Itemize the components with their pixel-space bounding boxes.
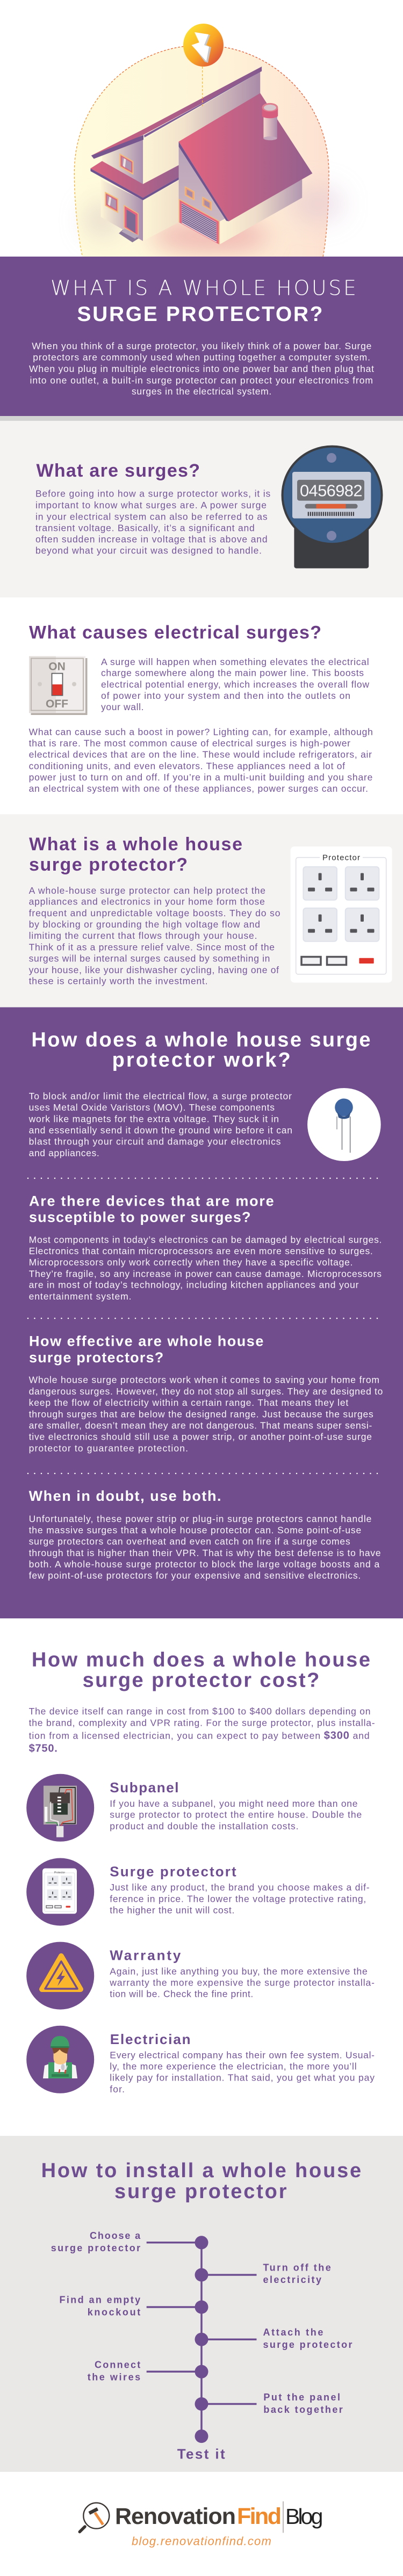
step: put the panel back together — [263, 2392, 343, 2415]
website url: blog.renovationfind.com — [132, 2534, 271, 2548]
heading: How does a whole house surge — [31, 1028, 370, 1051]
dotted divider — [28, 1318, 378, 1319]
icon: warning triangle — [26, 1942, 94, 2010]
wordmark: Renovation — [115, 2504, 236, 2529]
intro text — [29, 340, 374, 397]
icon: magnifier with hammer — [80, 2503, 109, 2532]
cost item: electrician — [26, 2026, 375, 2095]
body text: appliances and electronics in your home form those — [29, 896, 265, 907]
subheading: devices — [29, 1193, 274, 1225]
electrician heading: Electrician — [110, 2031, 190, 2047]
heading: surge protector — [114, 2180, 287, 2203]
body text: second paragraph: electrical devices that are on the line. These would include refrigerators, air — [29, 749, 372, 760]
body text: devices: are in most of today’s technology, including kitchen appliances and your — [29, 1280, 359, 1290]
title: SURGE PROTECTOR? — [77, 303, 322, 326]
body text: effectiveness: through surges that are below the designed range. Just because the surges — [29, 1409, 373, 1419]
body text: first paragraph — [101, 656, 369, 712]
body text: price range: the brand, complexity and VPR rating. For the surge protector, plus installa- — [29, 1717, 375, 1728]
panel: what causes electrical surges — [0, 597, 403, 814]
step: attach the surge protector — [263, 2327, 352, 2350]
heading — [41, 2159, 361, 2203]
cost item: subpanel — [26, 1774, 362, 1842]
subpanel text: surge protector to protect the entire house. Double the — [110, 1809, 362, 1820]
body text — [35, 488, 271, 556]
body text: often sudden increase in voltage that is above and — [35, 534, 268, 545]
body text: in your electrical system can also be referred to as — [35, 511, 268, 522]
body text: effectiveness: tive electronics should still use a power strip, or another point-of-use surge — [29, 1432, 372, 1442]
body text: first paragraph: your wall. — [101, 702, 144, 712]
wordmark: Blog — [285, 2504, 323, 2529]
step: connect the wires: the wires — [88, 2372, 140, 2383]
body text: effectiveness: dangerous surges. However, they do not stop all surges. They are designed to — [29, 1386, 383, 1397]
step: connect the wires: Connect — [95, 2360, 140, 2370]
body text: your house, like your dishwasher cycling, having one of — [29, 965, 279, 975]
wordmark — [115, 2501, 323, 2533]
step: turn off the electricity: Turn off the — [263, 2262, 331, 2273]
intro text: into one outlet, a built-in surge protector can protect your electronics from — [30, 375, 373, 385]
body text: price range: The device itself can range in cost from $100 to $400 dollars depending on — [29, 1706, 371, 1717]
title — [51, 276, 356, 326]
subheading: devices: Are there devices that are more — [29, 1193, 274, 1209]
step: put the panel back together: Put the panel — [263, 2392, 340, 2403]
body text: effectiveness: protector to guarantee protection. — [29, 1443, 188, 1454]
warranty text: warranty the more expensive the surge protector installa- — [109, 1977, 375, 1988]
body text: devices: Microprocessors only work correctly when they have a specific voltage. — [29, 1257, 352, 1268]
intro text: When you plug in multiple electronics into one power bar and then plug that — [29, 363, 374, 374]
panel: how does it work — [0, 1007, 403, 1618]
body text: use both: surge protectors can overheat and even catch on fire if a surge comes — [29, 1536, 350, 1547]
subheading: devices: susceptible to power surges? — [29, 1209, 250, 1225]
surge protector text: the higher the unit will cost. — [110, 1904, 234, 1915]
electrician text: for. — [110, 2084, 125, 2095]
body text: first paragraph: electrical potential energy, which increases the overall flow — [101, 679, 369, 690]
body text — [29, 885, 280, 987]
body text: MOV: and appliances. — [29, 1148, 99, 1158]
heading: What causes electrical surges? — [29, 622, 321, 643]
heading — [29, 834, 242, 875]
body text: effectiveness: are smaller, doesn’t mean they are not dangerous. That means super sensi- — [29, 1420, 372, 1431]
electrician text — [110, 2050, 375, 2095]
step: find an empty knockout: Find an empty — [59, 2294, 140, 2305]
body text: first paragraph: charge somewhere along the main power line. This boosts — [101, 668, 364, 678]
surge protector text — [110, 1882, 370, 1915]
surge protector text: ference in price. The lower the voltage protective rating, — [110, 1893, 366, 1904]
electrician text: likely pay for installation. That said, you get what you pay — [110, 2072, 375, 2083]
intro text: surges in the electrical system. — [132, 386, 271, 397]
body text: use both: the massive surges that a whole house protector can. Some point-of-use — [29, 1525, 361, 1536]
house — [90, 67, 312, 244]
step: find an empty knockout: knockout — [88, 2307, 140, 2317]
step: choose a surge protector — [51, 2230, 141, 2253]
body text: MOV: uses Metal Oxide Varistors (MOV). These components — [29, 1102, 275, 1113]
panel: cost — [0, 1618, 403, 2136]
intro text: When you think of a surge protector, you likely think of a power bar. Surge — [32, 340, 371, 351]
ground shadow — [84, 186, 344, 253]
timeline — [147, 2236, 257, 2443]
warranty text: Again, just like anything you buy, the more extensive the — [110, 1966, 368, 1977]
subheading: effectiveness — [29, 1333, 263, 1366]
dashed halo dome — [74, 45, 329, 259]
body text: by blocking or grounding the high voltage flow and — [29, 919, 260, 930]
subheading: effectiveness: surge protectors? — [29, 1349, 163, 1366]
step: attach the surge protector: surge protector — [263, 2339, 352, 2350]
body text: second paragraph: power just to turn on and off. If you’re in a multi-unit building and you share — [29, 772, 372, 783]
heading — [32, 1649, 370, 1691]
heading: How much does a whole house — [32, 1649, 370, 1672]
step: attach the surge protector: Attach the — [263, 2327, 323, 2338]
icon: mini surge protector — [26, 1858, 94, 1926]
step: find an empty knockout — [59, 2294, 140, 2317]
body text: effectiveness — [29, 1374, 383, 1454]
panel: how to install — [0, 2136, 403, 2472]
body text: devices — [29, 1234, 382, 1302]
heading: surge protector cost? — [83, 1669, 319, 1691]
panel: what are surges — [0, 421, 403, 597]
cost item: warranty — [26, 1942, 375, 2010]
body text: MOV: and essentially send it down the ground wire before it can — [29, 1125, 292, 1136]
body text: price range: $750. — [29, 1742, 57, 1754]
icon: mini surge protector: Protector — [54, 1871, 65, 1874]
dotted divider — [28, 1473, 378, 1474]
body text: these is certainly worth the investment. — [29, 976, 208, 987]
subpanel text: If you have a subpanel, you might need more than one — [110, 1798, 358, 1809]
icon: electric meter — [283, 447, 382, 568]
icon: electrician — [26, 2026, 94, 2093]
icon: subpanel — [26, 1774, 94, 1842]
body text: first paragraph: of power into your system and then into the outlets on — [101, 690, 350, 701]
body text: A whole-house surge protector can help protect the — [29, 885, 265, 896]
subheading: use both: When in doubt, use both. — [29, 1488, 221, 1504]
icon: electric meter: 0456982 — [300, 481, 363, 500]
icon: on/off switch — [29, 656, 87, 715]
step: turn off the electricity: electricity — [263, 2274, 321, 2285]
hero illustration — [74, 24, 344, 259]
icon: on/off switch: OFF — [46, 698, 68, 710]
lightning dashed connector — [202, 67, 203, 107]
body text: beyond what your circuit was designed to handle. — [35, 545, 262, 556]
body text: surges will be internal surges caused by something in — [29, 953, 270, 964]
body text: MOV: work like magnets for the extra voltage. They suck it in — [28, 1113, 279, 1124]
icon: on/off switch: ON — [48, 660, 66, 673]
cost item: surge protector — [26, 1858, 370, 1926]
body text: Before going into how a surge protector works, it is — [35, 488, 271, 499]
electrician text: Every electrical company has their own fee system. Usual- — [110, 2050, 375, 2061]
body text: important to know what surges are. A power surge — [35, 500, 267, 510]
body text: price range: tion from a licensed electrician, you can expect to pay between $300 and — [29, 1730, 370, 1741]
body text: second paragraph: What can cause such a boost in power? Lighting can, for example, although — [29, 726, 373, 737]
body text: effectiveness: keep the flow of electricity within a certain range. That means they let — [29, 1397, 348, 1408]
wordmark: Find — [237, 2504, 282, 2529]
body text: MOV: To block and/or limit the electrical flow, a surge protector — [29, 1091, 292, 1101]
icon: metal oxide varistor — [307, 1088, 381, 1161]
subheading: effectiveness: How effective are whole house — [29, 1333, 263, 1349]
icon: surge protector strip: Protector — [322, 853, 360, 862]
heading: How to install a whole house — [41, 2159, 361, 2182]
body text: Think of it as a pressure relief valve. Since most of the — [29, 942, 275, 952]
electrician text: ly, the more experience the electrician, the more you’ll — [110, 2061, 357, 2072]
body text: devices: entertainment system. — [29, 1291, 131, 1302]
body text: MOV — [28, 1091, 292, 1158]
body text: use both: both. A whole-house surge protector to block the large voltage boosts and a — [29, 1559, 379, 1570]
heading: What is a whole house — [29, 834, 242, 855]
body text: frequent and unpredictable voltage boosts. They do so — [29, 908, 280, 918]
step: turn off the electricity — [263, 2262, 331, 2285]
panel: what is a whole house surge protector — [0, 814, 403, 1007]
subpanel text: product and double the installation costs. — [110, 1821, 299, 1831]
body text: limiting the current that flows through your house. — [29, 930, 257, 941]
step: put the panel back together: back together — [263, 2404, 343, 2415]
warranty text: tion will be. Check the fine print. — [110, 1988, 253, 1999]
step: choose a surge protector: Choose a — [90, 2230, 141, 2241]
heading — [31, 1028, 370, 1071]
surge protector text: Just like any product, the brand you choose makes a dif- — [110, 1882, 370, 1893]
panel: intro — [0, 257, 403, 416]
footer logo — [80, 2501, 323, 2548]
dotted divider — [28, 1178, 378, 1179]
body text: use both — [29, 1514, 381, 1581]
body text: use both: through that is higher than their VPR. That is why the best defense is to have — [29, 1548, 381, 1558]
body text: transient voltage. Basically, it’s a significant and — [35, 522, 255, 533]
body text: second paragraph — [29, 726, 373, 794]
title: WHAT IS A WHOLE HOUSE — [51, 276, 356, 300]
intro text: protectors are commonly used when putting together a computer system. — [33, 352, 370, 362]
warranty heading: Warranty — [110, 1947, 181, 1964]
body text: effectiveness: Whole house surge protectors work when it comes to saving your home from — [29, 1374, 379, 1385]
body text: MOV: blast through your circuit and damage your electronics — [29, 1136, 281, 1147]
step: choose a surge protector: surge protector — [51, 2243, 140, 2253]
heading: protector work? — [112, 1049, 291, 1071]
surge protector heading: Surge protectort — [110, 1863, 236, 1879]
icon: surge protector strip — [291, 846, 392, 983]
body text: devices: Most components in today’s electronics can be damaged by electrical surges. — [29, 1234, 382, 1245]
warranty text — [109, 1966, 375, 1999]
subpanel text — [110, 1798, 362, 1831]
step: test it: Test it — [177, 2446, 225, 2462]
body text: price range — [29, 1706, 375, 1754]
body text: devices: Electronics that contain microprocessors are even more sensitive to surges. — [29, 1246, 373, 1257]
heading: surge protector? — [29, 855, 188, 875]
body text: use both: few point-of-use protectors for your expensive and sensitive electronics. — [29, 1570, 361, 1581]
body text: second paragraph: that is rare. The most common cause of electrical surges is high-power — [29, 738, 350, 748]
body text: second paragraph: an electrical system with one of these appliances, power surges can occur. — [29, 783, 368, 794]
subpanel heading: Subpanel — [110, 1779, 178, 1796]
body text: first paragraph: A surge will happen when something elevates the electrical — [101, 656, 369, 667]
heading: What are surges? — [37, 461, 200, 481]
icon: lightning badge — [183, 24, 224, 67]
body text: devices: They’re fragile, so any increase in power can cause damage. Microprocessors — [29, 1268, 382, 1279]
body text: second paragraph: conditioning units, and even elevators. These appliances need a lot of — [29, 761, 345, 771]
step: connect the wires — [88, 2360, 140, 2383]
body text: use both: Unfortunately, these power strip or plug-in surge protectors cannot handle — [29, 1514, 371, 1524]
